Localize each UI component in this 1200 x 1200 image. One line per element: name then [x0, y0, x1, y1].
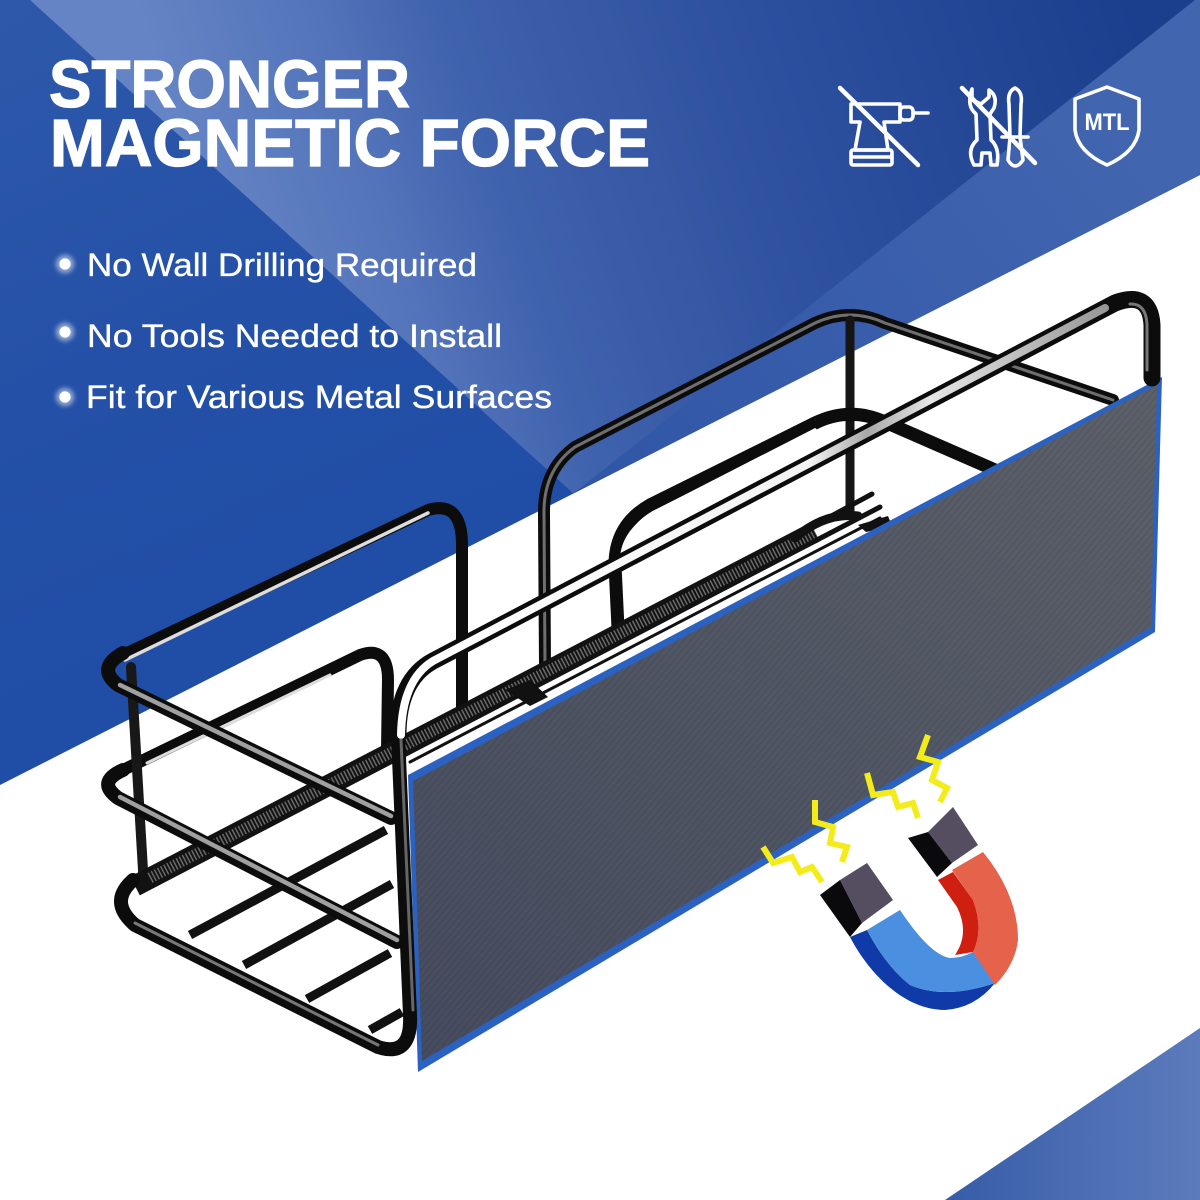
- title: STRONGER: [49, 47, 410, 122]
- magnet: red face: [952, 852, 1018, 985]
- inner rail: [615, 414, 995, 628]
- bullet list: [56, 247, 552, 415]
- background: corner accent: [945, 1028, 1200, 1200]
- bullet: metal surfaces: Fit for Various Metal Surfaces: [86, 379, 552, 415]
- icon: no tools: [962, 88, 1035, 166]
- bullet: no tools: No Tools Needed to Install: [87, 318, 502, 354]
- front middle rail: [108, 770, 397, 942]
- mesh cross piece: [505, 680, 548, 706]
- sparks: [763, 735, 947, 882]
- magnet: [763, 735, 1018, 1010]
- background: blue diagonal panel: [0, 0, 1200, 800]
- title: [49, 47, 650, 181]
- left post: [131, 667, 144, 887]
- mesh bottom rail: [135, 494, 892, 886]
- icon: no drill: [840, 88, 928, 165]
- middle back rail: [123, 653, 388, 770]
- backing magnetic plate: [408, 377, 1162, 1072]
- mesh end blob: [858, 516, 892, 532]
- icon: MTL shield: MTL: [1084, 109, 1130, 136]
- magnet: right pole: [908, 807, 978, 877]
- title: MAGNETIC FORCE: [50, 106, 650, 181]
- magnet: blue leg side: [850, 930, 995, 1010]
- floor ribs: [190, 830, 402, 1030]
- left back rail: [123, 508, 462, 707]
- magnet: red inner side: [938, 872, 978, 955]
- bullet: no wall drilling: No Wall Drilling Required: [87, 247, 477, 283]
- magnet: left pole: [820, 863, 893, 937]
- icon: MTL shield: [1075, 87, 1139, 165]
- basket: front rails: [108, 299, 1152, 1049]
- magnet: blue face: [867, 910, 995, 992]
- front long rail: [121, 299, 1152, 1049]
- back top rail: [544, 315, 1113, 665]
- center post: [846, 320, 854, 515]
- basket: back rails and mesh: [123, 315, 1113, 1030]
- front top-left rail: [108, 653, 391, 818]
